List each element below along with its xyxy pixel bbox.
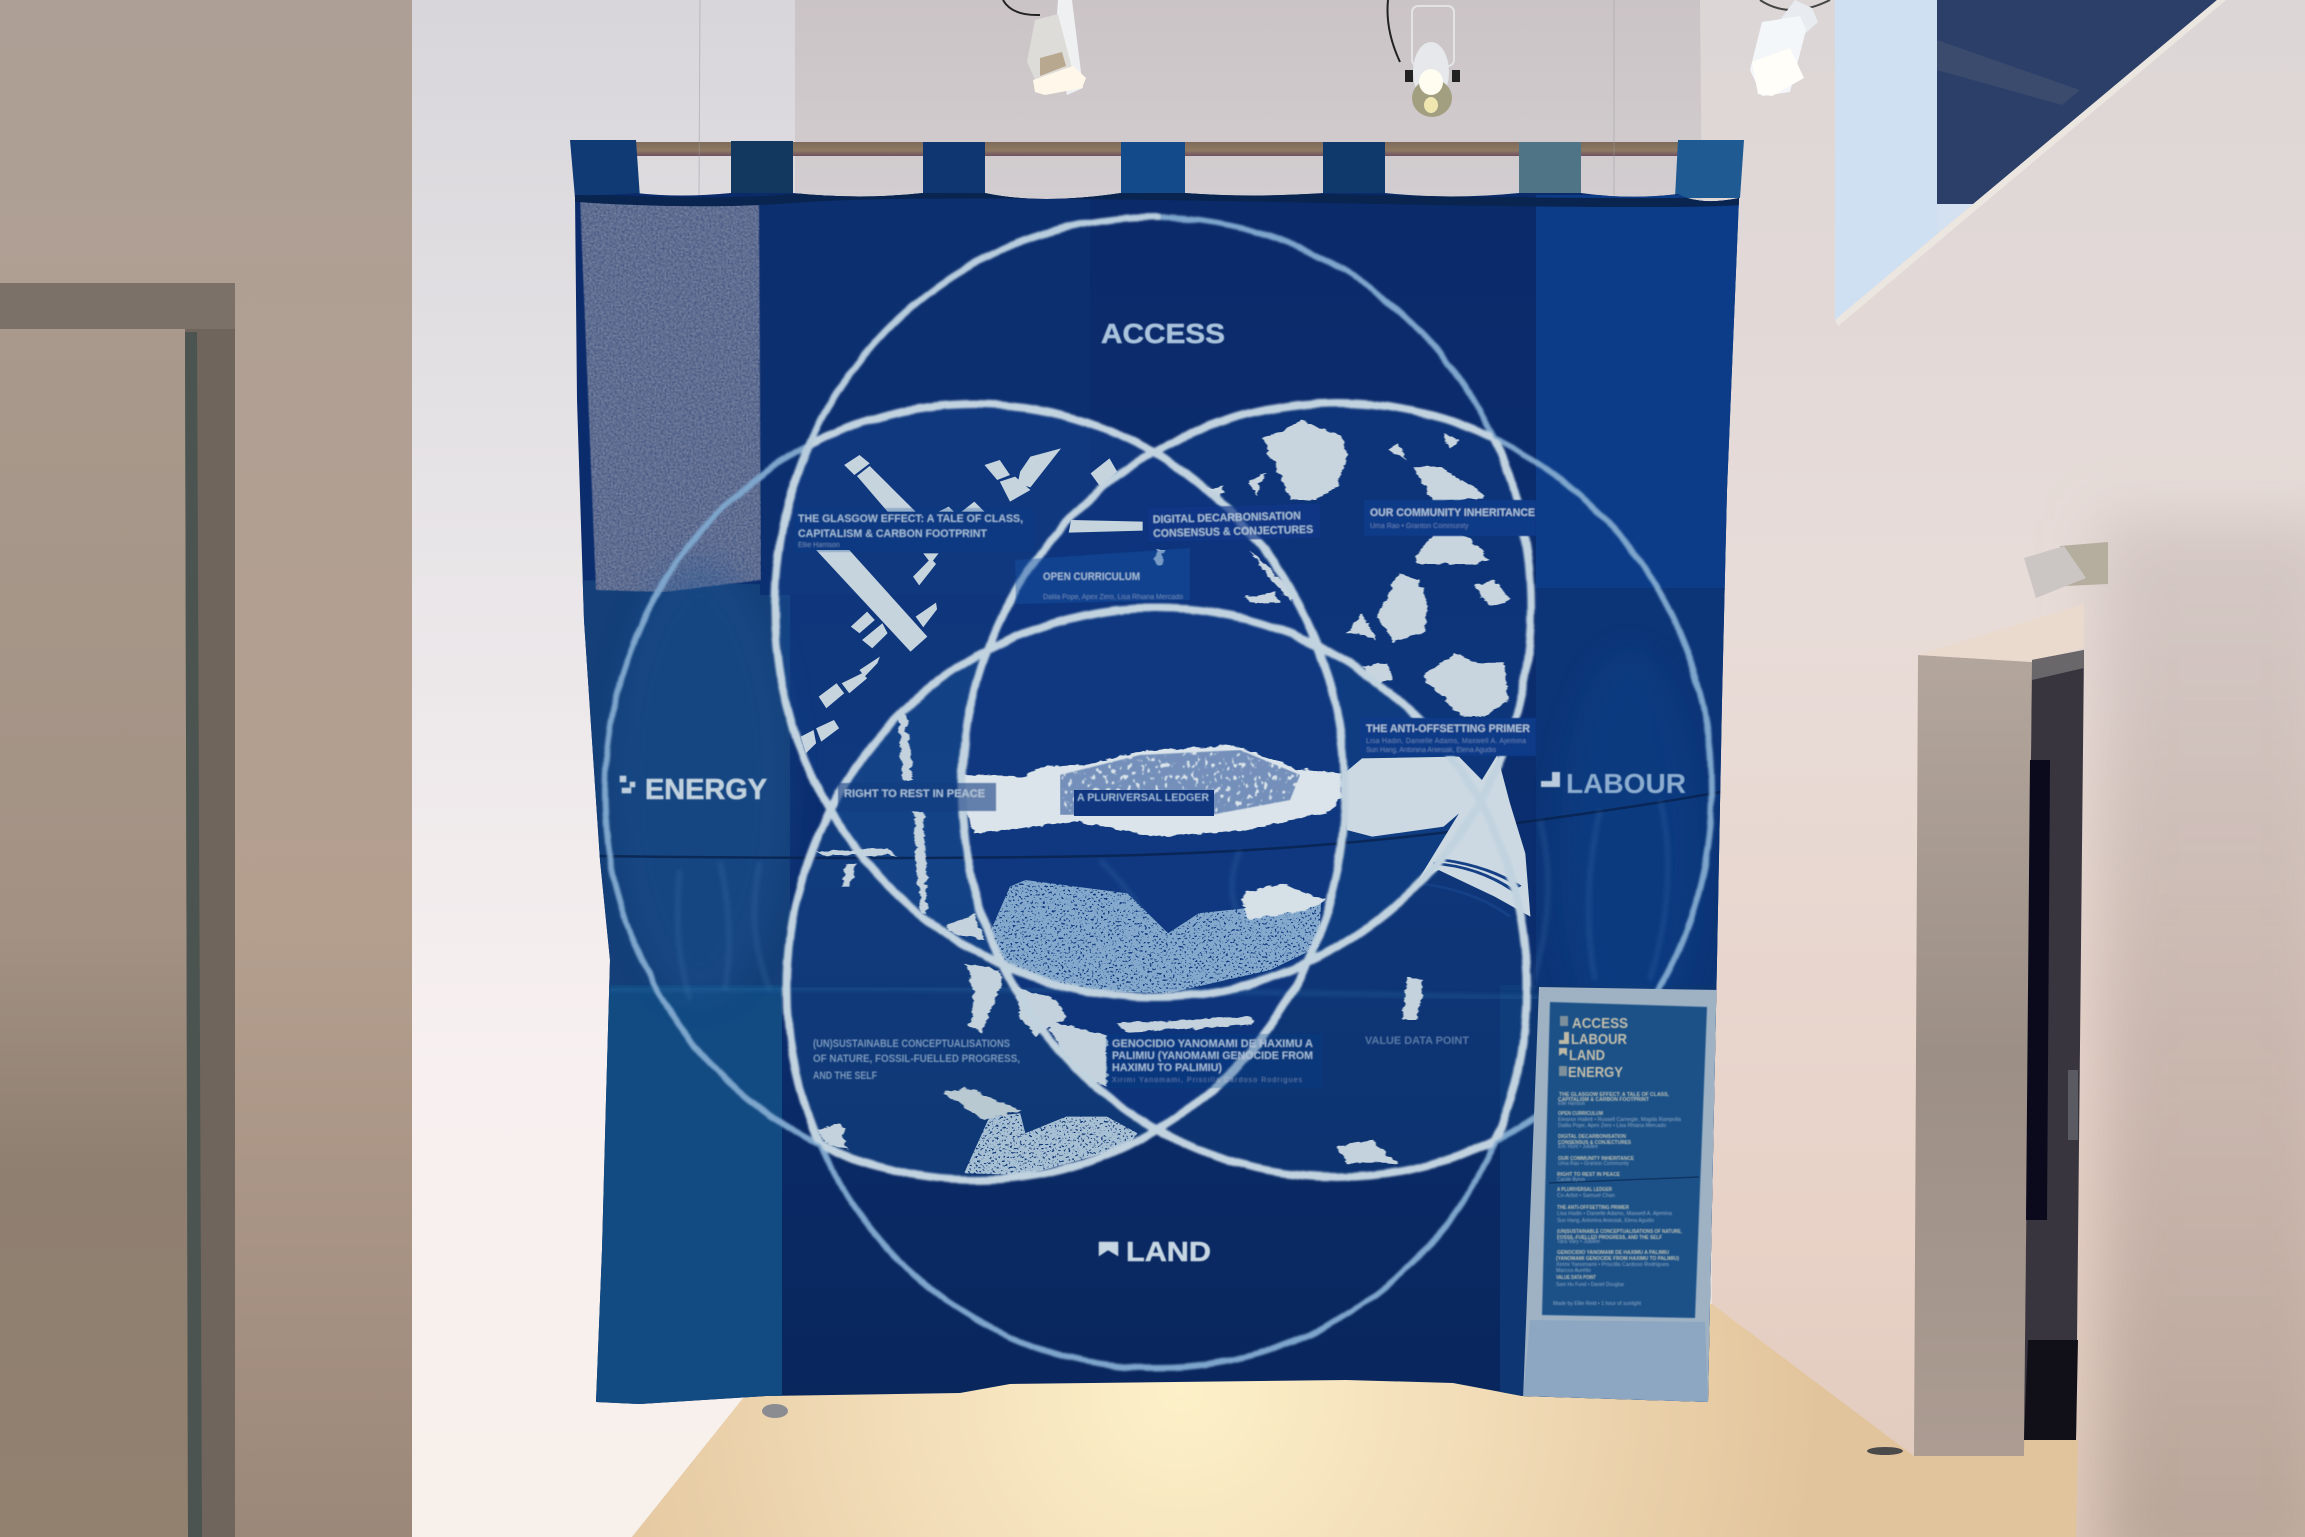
legend project list: Sam Hu Fund • Daniel Douglas [1556,1282,1624,1288]
photo layer: bottom speckled image [944,1087,1138,1175]
floor socket discs [762,1404,1903,1455]
label: Open Curriculum: OPEN CURRICULUM [1043,571,1140,583]
legend headings: ACCESS [1572,1015,1628,1032]
legend project list: (UN)SUSTAINABLE CONCEPTUALISATIONS OF NATURE, [1557,1229,1682,1235]
heading: ACCESS: ACCESS [1101,318,1225,349]
label: Unsustainable conceptualisations: OF NATURE, FOSSIL-FUELLED PROGRESS, [813,1053,1020,1065]
legend project list: OPEN CURRICULUM [1558,1111,1603,1117]
heading: ENERGY [618,774,768,800]
dark doorway [2024,650,2084,1440]
label: Anti-offsetting primer: Sun Hang, Antonina Aniesiak, Elena Agudio [1366,747,1496,754]
photo layer: lower left fragments [816,713,1423,1163]
label: Anti-offsetting primer [1360,718,1536,756]
legend icons [1559,1016,1569,1076]
label: Anti-offsetting primer: THE ANTI-OFFSETTING PRIMER [1366,723,1530,735]
project labels printed on cloth [794,500,1536,1088]
cloth patch: right middle [1536,588,1736,988]
legend project list: CAPITALISM & CARBON FOOTPRINT [1558,1097,1650,1103]
photo layer: mountain landscape strip [962,745,1342,837]
seams and fabric folds [590,790,1730,1000]
track light: centre [1388,0,1460,117]
legend project list: (YANOMAMI GENOCIDE FROM HAXIMU TO PALIMIU) [1556,1256,1679,1262]
heading: LABOUR [1540,771,1686,794]
legend project list: DIGITAL DECARBONISATION [1558,1134,1626,1140]
label: Community inheritance [1364,500,1536,536]
right wall shading beyond door [2100,520,2305,1537]
door lintel [1918,604,2084,662]
heading: LABOUR: LABOUR [1566,768,1686,799]
hanging rod [632,142,1692,156]
legend project list: Xirimi Yanomami • Priscilla Cardoso Rodrigues [1556,1262,1669,1268]
legend project list: Tara Vary • Jubilee [1557,1239,1600,1245]
track light: right [1750,0,1830,96]
legend project list [1553,1092,1682,1307]
legend headings: ENERGY [1568,1064,1623,1081]
banner base cloth [560,180,1750,1420]
cloth patch: lower right [1500,985,1730,1405]
label: Genocidio Yanomami: HAXIMU TO PALIMIU) [1112,1062,1222,1074]
legend project list: GENOCIDIO YANOMAMI DE HAXIMU A PALIMIU [1557,1250,1669,1256]
heading: LAND [1098,1241,1211,1262]
legend headings: LABOUR [1571,1031,1627,1048]
door jamb [1914,655,2032,1456]
label: Right to rest in peace [838,783,996,811]
label: Right to rest in peace: RIGHT TO REST IN PEACE [844,788,985,800]
lens tints [605,217,1712,1180]
top hem shadow [570,194,1745,203]
legend project list: FOSSIL-FUELLED PROGRESS, AND THE SELF [1557,1235,1663,1241]
label: Pluriversal ledger: A PLURIVERSAL LEDGER [1077,792,1209,804]
cloth patch: top column [760,195,1090,595]
legend headings [1559,1015,1628,1081]
upper window [1835,0,2226,326]
bright rings inside overlaps [769,212,1537,1371]
legend project list: Uma Rao • Granton Community [1558,1161,1629,1167]
label: Genocidio Yanomami: PALIMIU (YANOMAMI GENOCIDE FROM [1112,1050,1313,1062]
wood floor [632,1300,2078,1537]
cloth patch: lower left [590,985,782,1410]
Venn circles [605,217,1712,1368]
legend project list: THE ANTI-OFFSETTING PRIMER [1557,1205,1629,1211]
legend project list: Eric Hunt • Jubilee [1558,1144,1598,1150]
far back wall [795,0,1843,1537]
label: Glasgow Effect: Ellie Harrison [798,542,840,549]
track light: left [1003,0,1086,95]
legend project list: CONSENSUS & CONJECTURES [1558,1140,1631,1146]
label: Genocidio Yanomami: GENOCIDIO YANOMAMI DE HAXIMU A [1112,1038,1313,1050]
label: Digital decarbonisation [1148,504,1320,542]
wall alarm box [2024,542,2108,598]
legend project list: Ellie Harrison [1558,1101,1585,1107]
label: Genocidio Yanomami [1106,1034,1322,1088]
label: Glasgow Effect [794,508,1034,552]
legend project list: Carole Byron [1557,1177,1585,1183]
legend project list: A PLURIVERSAL LEDGER [1557,1187,1612,1193]
banner tabs [570,140,1744,198]
wall niche with panel [0,283,235,1537]
legend project list: OUR COMMUNITY INHERITANCE [1558,1156,1634,1162]
legend project list: Lisa Hadin • Danielle Adams, Maxwell A. Ajemina [1557,1211,1672,1217]
dim outer rings [605,217,1712,1368]
white pier wall [412,0,796,1537]
legend panel [1523,987,1720,1405]
label: Glasgow Effect: CAPITALISM & CARBON FOOTPRINT [798,528,987,540]
legend crease [1549,1177,1699,1183]
icon: land flag [1099,1242,1118,1256]
label: Community inheritance: OUR COMMUNITY INHERITANCE [1370,507,1535,519]
legend project list: Marcos Aurélio [1556,1268,1591,1274]
legend project list: Sun Hang, Antonina Aniesiak, Elena Agudio [1557,1218,1654,1224]
icon: energy squares [620,776,635,793]
photo layer: Glasgow city map shapes [801,448,1143,753]
icon: labour stepped square [1541,772,1560,787]
legend project list: VALUE DATA POINT [1556,1275,1597,1281]
photo layer: white wedge with stripes [1344,755,1530,917]
cyanotype banner [560,180,1750,1420]
legend blue print [1542,1002,1707,1318]
right wall [632,0,2305,1537]
label: Unsustainable conceptualisations: (UN)SUSTAINABLE CONCEPTUALISATIONS [813,1038,1010,1050]
label: Digital decarbonisation: CONSENSUS & CONJECTURES [1153,524,1313,540]
photo layer: community inheritance rock forms [1155,420,1510,717]
label: Unsustainable conceptualisations [813,1038,1020,1082]
label: Open Curriculum: Dalila Pope, Apex Zero, Lisa Rhiana Mercado [1043,594,1183,601]
label: Digital decarbonisation: DIGITAL DECARBONISATION [1153,510,1301,526]
woven grey patch [580,198,761,592]
label: Unsustainable conceptualisations: AND THE SELF [813,1070,877,1082]
label: Open Curriculum [1015,548,1190,604]
label: Community inheritance: Uma Rao • Granton Community [1370,523,1469,530]
left beige wall [0,0,412,1537]
legend pale cloth [1523,987,1720,1405]
legend project list: THE GLASGOW EFFECT: A TALE OF CLASS, [1559,1092,1669,1098]
legend project list: Made by Ellie Reid • 1 hour of sunlight [1553,1301,1641,1307]
heading: ENERGY: ENERGY [645,774,767,806]
legend project list: RIGHT TO REST IN PEACE [1557,1172,1620,1178]
photo layer: forest speckle [990,880,1326,993]
label: Anti-offsetting primer: Lisa Hadin, Danielle Adams, Maxwell A. Ajemina [1366,738,1526,745]
legend project list: Eleanor Hallett • Russell Carnegie, Magda Rampolla [1558,1117,1681,1123]
legend project list: Co-Artist • Samuel Chan [1557,1193,1615,1199]
hanging wires [699,0,1614,195]
label: Value data point: VALUE DATA POINT [1365,1035,1469,1047]
legend project list: Dalila Pope, Apex Zero • Lisa Rhiana Mercado [1558,1123,1666,1129]
legend headings: LAND [1569,1047,1605,1064]
cloth patch: left middle [570,580,790,990]
cloth patch: top right [1536,195,1741,590]
heading: LAND: LAND [1126,1236,1211,1267]
label: Genocidio Yanomami: Xirimi Yanomami, Priscilla Cardoso Rodrigues [1112,1077,1302,1084]
label: Glasgow Effect: THE GLASGOW EFFECT: A TALE OF CLASS, [798,513,1023,525]
